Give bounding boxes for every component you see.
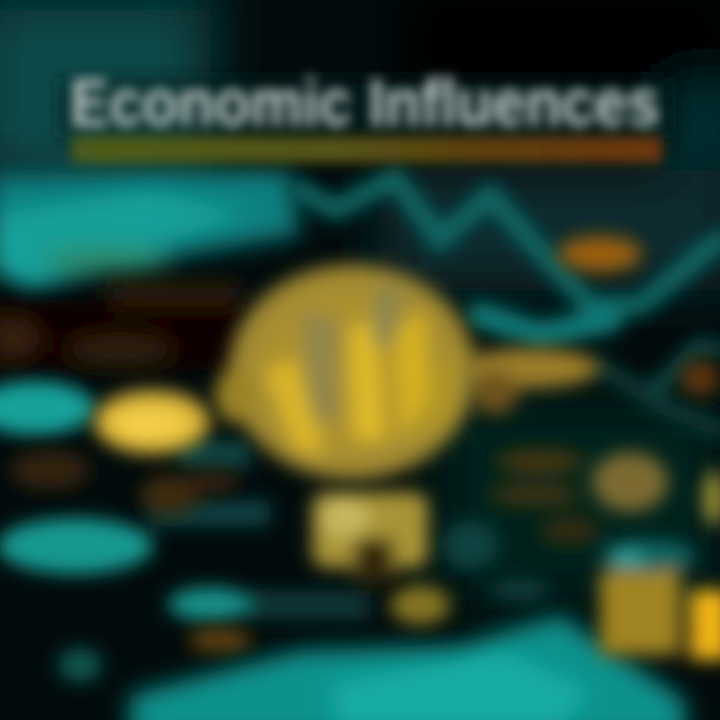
- right-hand coin stacks: [390, 348, 720, 660]
- coin disc: [215, 264, 476, 480]
- yellow coin left: [94, 390, 210, 454]
- subtitle strip: [72, 136, 662, 163]
- teal coins left: [0, 381, 370, 682]
- central coin on pedestal: [215, 264, 476, 584]
- bottom teal band: [130, 615, 685, 720]
- pedestal: [312, 492, 428, 584]
- line chart strokes: [300, 178, 720, 430]
- teal banner upper left: [0, 170, 300, 295]
- orange coin upper right: [558, 236, 720, 396]
- dark band and brown left: [0, 285, 240, 370]
- title shadow: [60, 78, 670, 138]
- dark brown stacks: [10, 450, 252, 652]
